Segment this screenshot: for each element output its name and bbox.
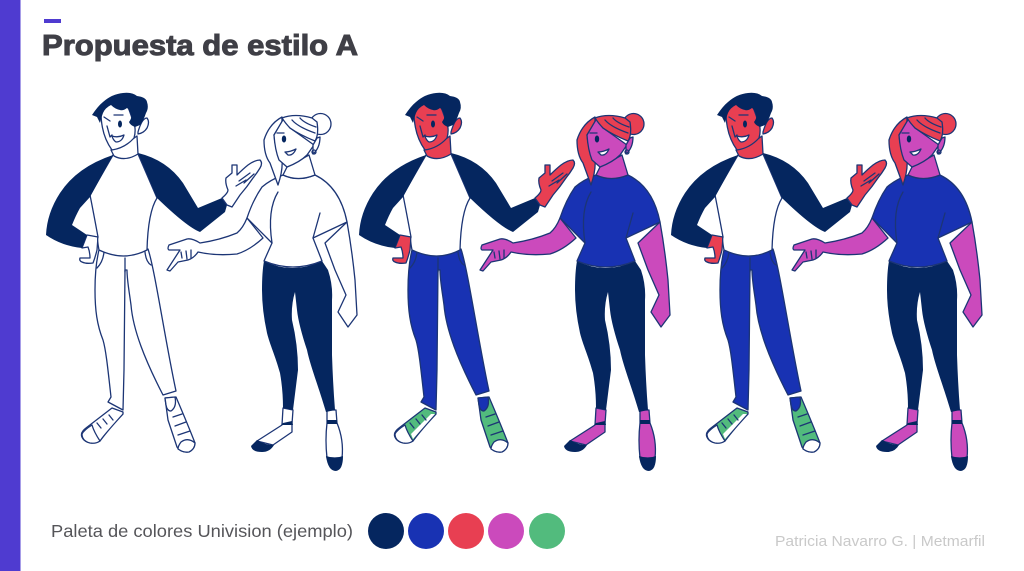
illustration: colour version 2 man and woman [671, 93, 982, 471]
title accent dash [44, 19, 61, 23]
illustration: colour version 1 man and woman [359, 93, 670, 471]
left accent bar [0, 0, 20, 571]
palette label: Paleta de colores Univision (ejemplo) [51, 521, 353, 541]
author credit: Patricia Navarro G. | Metmarfil [775, 534, 985, 550]
illustration: line art man and woman [46, 93, 357, 471]
colour palette swatches [368, 513, 565, 549]
title: Propuesta de estilo A [42, 30, 358, 62]
